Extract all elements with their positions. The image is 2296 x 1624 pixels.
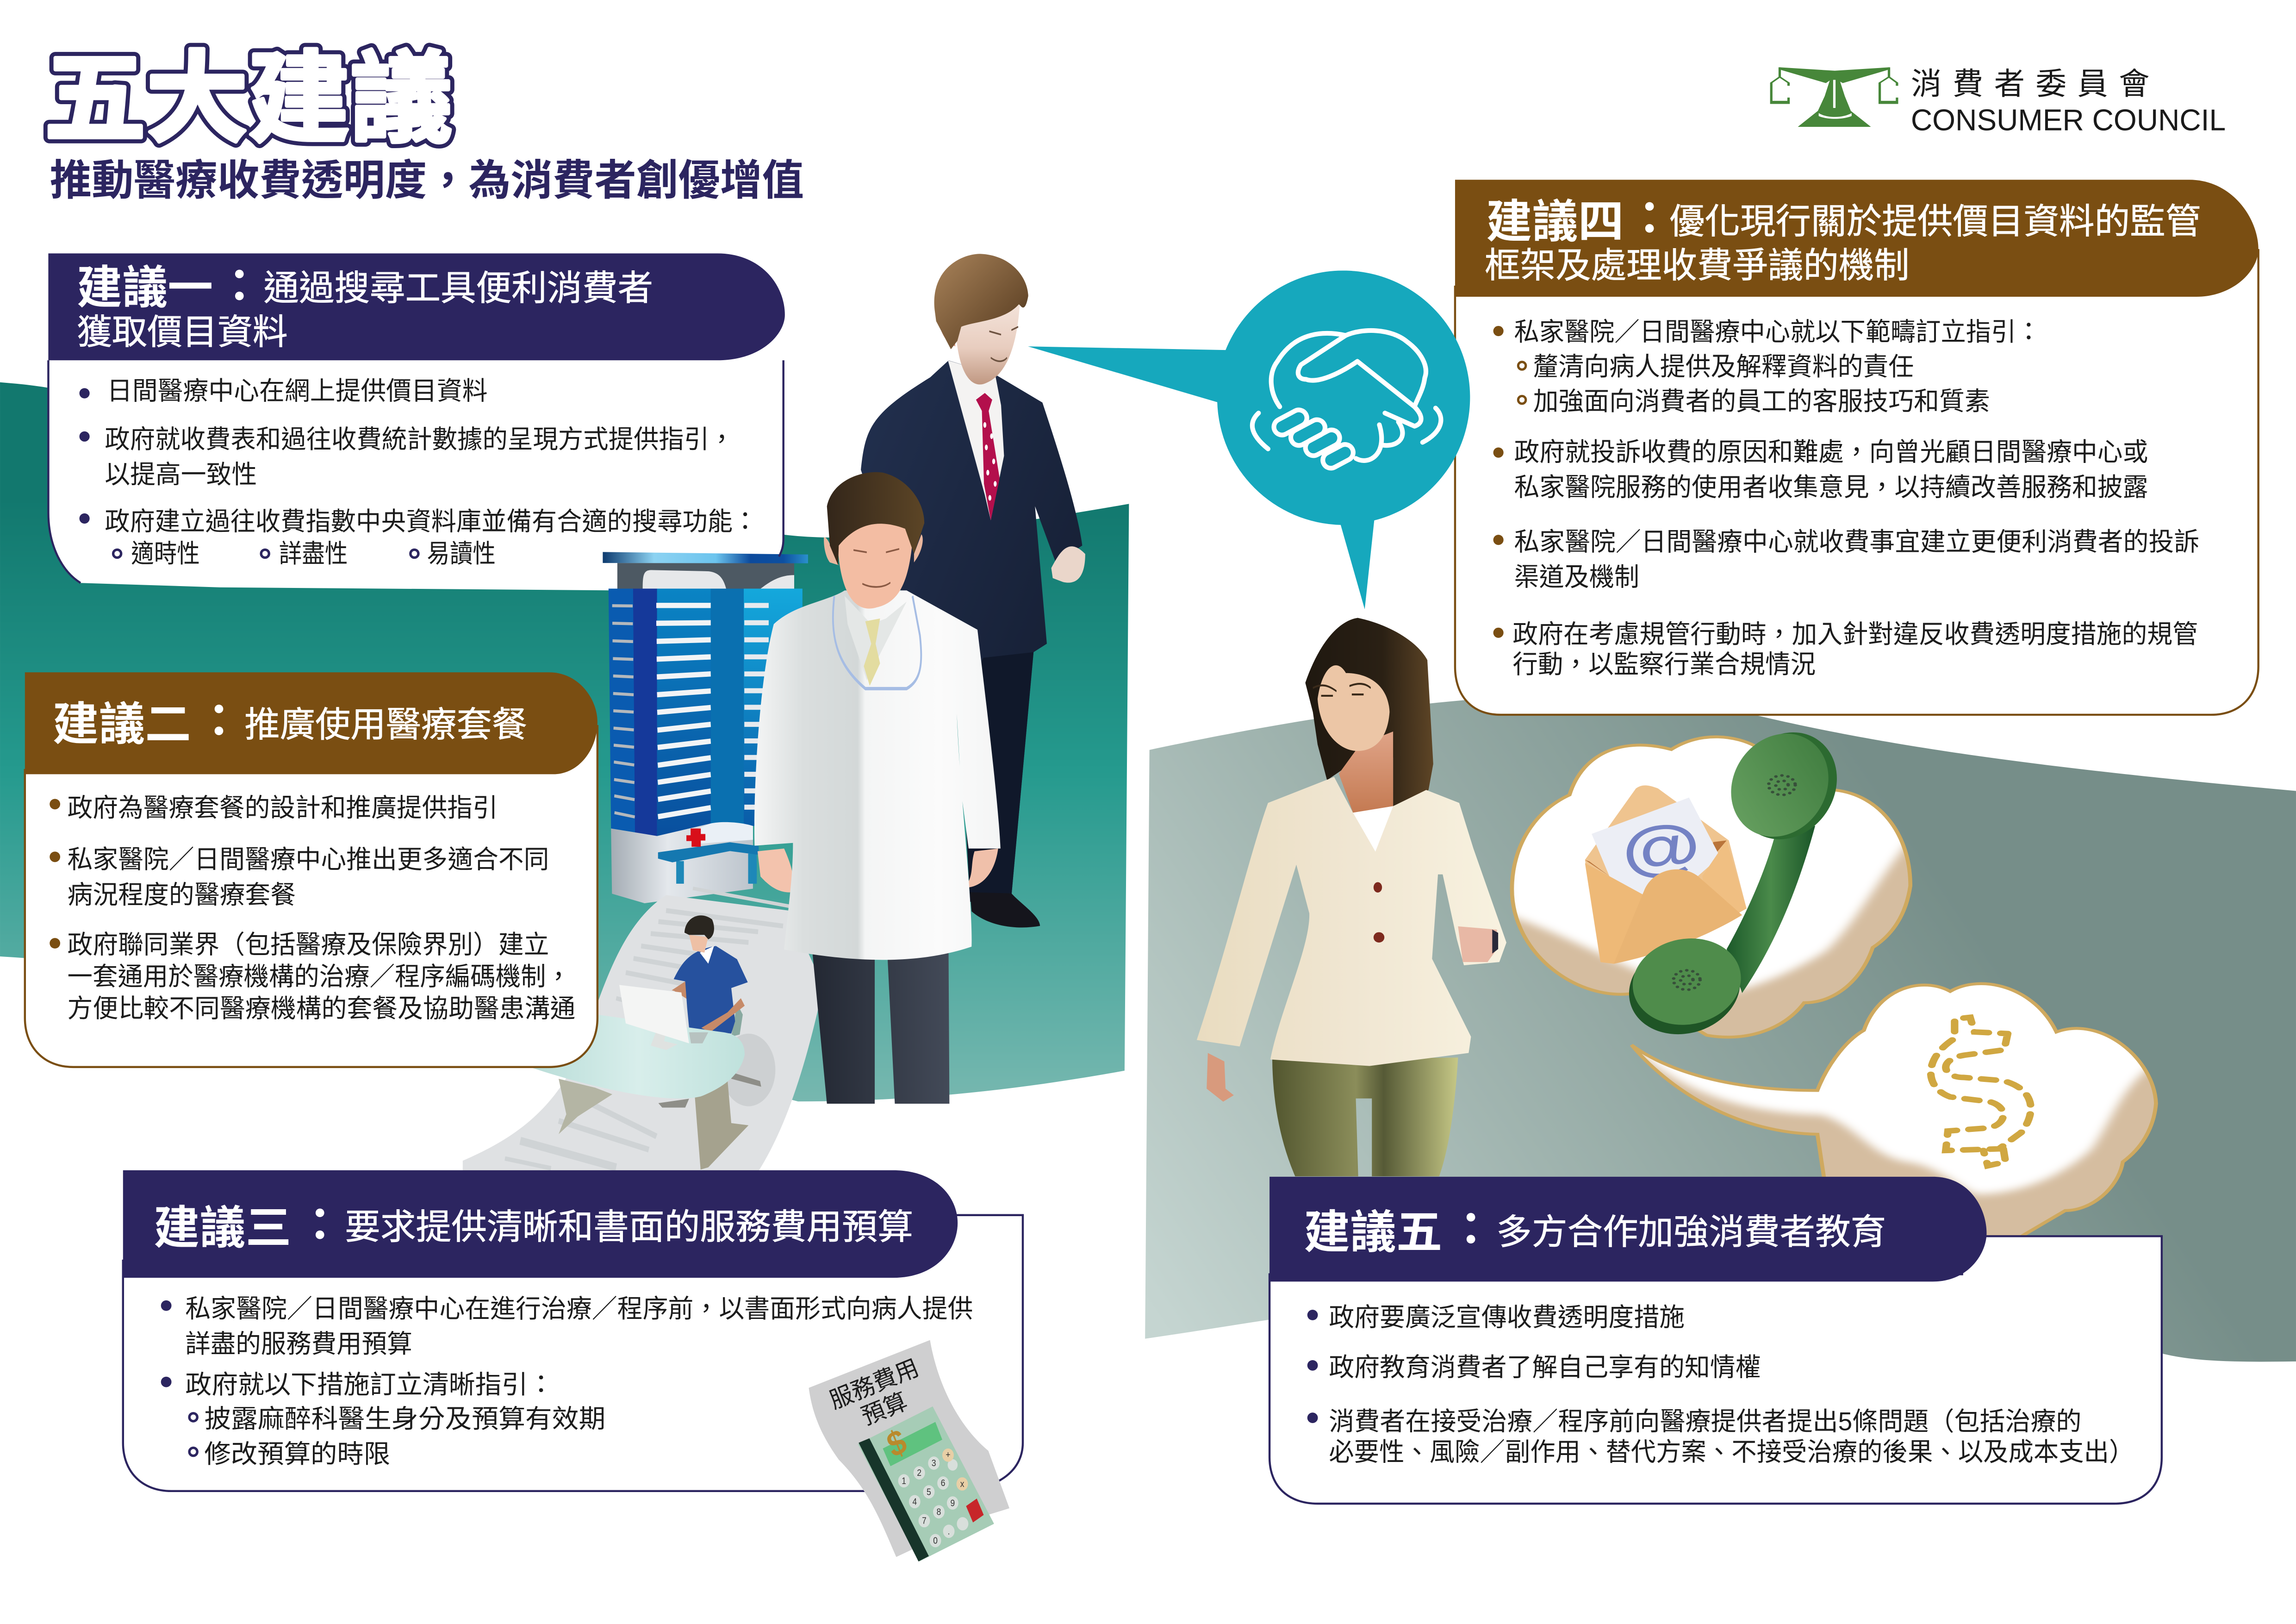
heading bar 3 — [123, 1170, 958, 1278]
illustration: long medical bill with receptionist at desk — [463, 888, 823, 1172]
title: 五大建議 — [44, 43, 453, 155]
body text 4: 行動，以監察行業合規情況 — [1512, 650, 1816, 679]
body text 1: 政府就收費表和過往收費統計數據的呈現方式提供指引， — [105, 425, 734, 454]
body text 4: 釐清向病人提供及解釋資料的責任 — [1533, 352, 1914, 381]
body text 5 — [1307, 1303, 2134, 1467]
body text 3: 政府就以下措施訂立清晰指引： — [185, 1370, 554, 1399]
title: 五大建議 — [44, 43, 453, 155]
calculator: $ — [882, 1421, 912, 1466]
body text 1: 易讀性 — [427, 539, 496, 568]
panel: recommendation 1 — [48, 253, 785, 583]
heading bar 4: 優化現行關於提供價目資料的監管 — [1669, 202, 2201, 242]
logo emblem: scales of justice — [1771, 67, 1897, 127]
body text 2: 私家醫院／日間醫療中心推出更多適合不同 — [68, 845, 549, 874]
icon: envelope with @ letter: @ — [1615, 810, 1706, 885]
panel: recommendation 4 — [1455, 180, 2259, 679]
illustration: woman consumer — [1197, 618, 1506, 1176]
logo: Consumer Council: CONSUMER COUNCIL — [1911, 103, 2226, 137]
heading bar 2: 推廣使用醫療套餐 — [244, 705, 527, 744]
calculator: 9 — [951, 1498, 955, 1508]
body text 3: 詳盡的服務費用預算 — [185, 1330, 412, 1358]
body text 4: 私家醫院／日間醫療中心就以下範疇訂立指引： — [1514, 318, 2041, 346]
heading bar 4: 建議四 — [1486, 196, 1624, 247]
body text 2: 方便比較不同醫療機構的套餐及協助醫患溝通 — [68, 994, 575, 1023]
background: teal wave — [0, 382, 1129, 1101]
body text 4: 渠道及機制 — [1514, 563, 1639, 592]
body text 1: 詳盡性 — [279, 539, 348, 568]
body text 4: 私家醫院／日間醫療中心就收費事宜建立更便利消費者的投訴 — [1514, 528, 2199, 556]
illustration: doctor in white coat — [754, 472, 1001, 1104]
computer monitor — [651, 1026, 678, 1050]
subtitle: 推動醫療收費透明度，為消費者創優增值 — [50, 157, 804, 204]
body text 1: 日間醫療中心在網上提供價目資料 — [107, 377, 488, 406]
budget paper — [809, 1340, 1009, 1557]
panel: recommendation 5 — [1269, 1177, 2162, 1504]
panel 1 white backing — [48, 360, 785, 592]
illustration: service fee budget document with calculator: 服務費用 — [826, 1354, 922, 1414]
office chair — [659, 1072, 761, 1107]
calculator: x — [960, 1479, 964, 1489]
heading bar 3: 要求提供清晰和書面的服務費用預算 — [345, 1208, 913, 1247]
body text 3: 修改預算的時限 — [204, 1440, 390, 1468]
calculator: 8 — [937, 1506, 941, 1517]
heading bar 5: 建議五 — [1304, 1207, 1442, 1258]
icon: handshake — [1252, 331, 1441, 471]
hospital window stripes — [612, 606, 769, 817]
calculator: 2 — [917, 1468, 921, 1478]
heading bar 5: 多方合作加強消費者教育 — [1497, 1213, 1886, 1252]
body text 2: 一套通用於醫療機構的治療／程序編碼機制， — [68, 962, 571, 991]
heading bar 2: ： — [196, 695, 242, 746]
body text 5: 政府教育消費者了解自己享有的知情權 — [1329, 1353, 1761, 1381]
heading bar 1: 通過搜尋工具便利消費者 — [264, 269, 653, 308]
heading bar 3: ： — [297, 1199, 342, 1250]
illustration: hospital building — [603, 552, 808, 903]
body text 2: 政府聯同業界（包括醫療及保險界別）建立 — [68, 931, 549, 959]
calculator: + — [946, 1449, 951, 1460]
heading bar 4 — [1455, 180, 2259, 297]
calculator: . — [948, 1526, 950, 1537]
heading bar 4: ： — [1627, 193, 1672, 244]
body text 4: 政府就投訴收費的原因和難處，向曾光顧日間醫療中心或 — [1514, 438, 2148, 467]
seated staff member — [672, 915, 748, 1034]
background: grey-green wave — [1145, 697, 2296, 1362]
heading bar 1: 建議一 — [77, 262, 213, 313]
calculator: 0 — [933, 1535, 938, 1546]
desk — [559, 1079, 612, 1134]
illustration: service fee budget document with calculator — [809, 1340, 1009, 1562]
body text 3 — [161, 1294, 973, 1468]
heading bar 1: 獲取價目資料 — [77, 313, 288, 352]
calculator: 4 — [912, 1496, 917, 1507]
icon: green telephone receiver — [1611, 726, 1848, 1047]
illustration: thought cloud with envelope and telephone — [1510, 735, 1912, 1039]
calculator: 3 — [932, 1458, 936, 1468]
body text 1: 以提高一致性 — [105, 460, 257, 489]
body text 5: 政府要廣泛宣傳收費透明度措施 — [1329, 1303, 1685, 1332]
heading bar 2 — [25, 672, 597, 774]
panel: recommendation 3 — [123, 1170, 1023, 1491]
calculator: 7 — [922, 1515, 927, 1526]
panel: recommendation 2 — [25, 672, 597, 1067]
illustration: businessman in suit — [861, 254, 1085, 927]
calculator: 5 — [927, 1487, 931, 1497]
body text 3: 披露麻醉科醫生身分及預算有效期 — [204, 1405, 605, 1433]
body text 5: 必要性、風險／副作用、替代方案、不接受治療的後果、以及成本支出） — [1329, 1438, 2134, 1467]
body text 1: 政府建立過往收費指數中央資料庫並備有合適的搜尋功能： — [105, 507, 758, 536]
logo: Consumer Council — [1771, 67, 2226, 137]
body text 2: 病況程度的醫療套餐 — [68, 881, 296, 909]
calculator — [858, 1406, 994, 1562]
icon: envelope with @ letter — [1585, 785, 1747, 964]
icon: dashed dollar sign — [1931, 1018, 2031, 1166]
body text 2 — [50, 793, 575, 1023]
body text 3: 私家醫院／日間醫療中心在進行治療／程序前，以書面形式向病人提供 — [185, 1294, 973, 1323]
heading bar 1: ： — [217, 261, 262, 312]
heading bar 4: 框架及處理收費爭議的機制 — [1485, 246, 1910, 286]
logo: Consumer Council: 消費者委員會 — [1911, 67, 2150, 101]
heading bar 2: 建議二 — [53, 699, 191, 750]
body text 4 — [1493, 318, 2199, 679]
body text 5: 消費者在接受治療／程序前向醫療提供者提出5條問題（包括治療的 — [1329, 1407, 2081, 1436]
calculator: 1 — [902, 1475, 906, 1486]
panel 4 box — [1455, 249, 2259, 715]
body text 2: 政府為醫療套餐的設計和推廣提供指引 — [68, 793, 498, 822]
body text 1: 適時性 — [131, 539, 200, 568]
body text 4: 政府在考慮規管行動時，加入針對違反收費透明度措施的規管 — [1512, 620, 2198, 649]
speech cloud with dollar sign — [1630, 982, 2158, 1235]
body text 4: 私家醫院服務的使用者收集意見，以持續改善服務和披露 — [1514, 473, 2148, 501]
calculator: 6 — [941, 1478, 945, 1488]
illustration: service fee budget document with calculator: 預算 — [858, 1388, 911, 1430]
speech bubble with handshake icon — [1028, 270, 1470, 609]
heading bar 5: ： — [1448, 1204, 1493, 1255]
heading bar 1 — [48, 253, 785, 360]
body text 4: 加強面向消費者的員工的客服技巧和質素 — [1533, 387, 1990, 416]
heading bar 3: 建議三 — [154, 1202, 292, 1253]
heading bar 5 — [1269, 1177, 1986, 1281]
body text 1 — [80, 377, 758, 568]
